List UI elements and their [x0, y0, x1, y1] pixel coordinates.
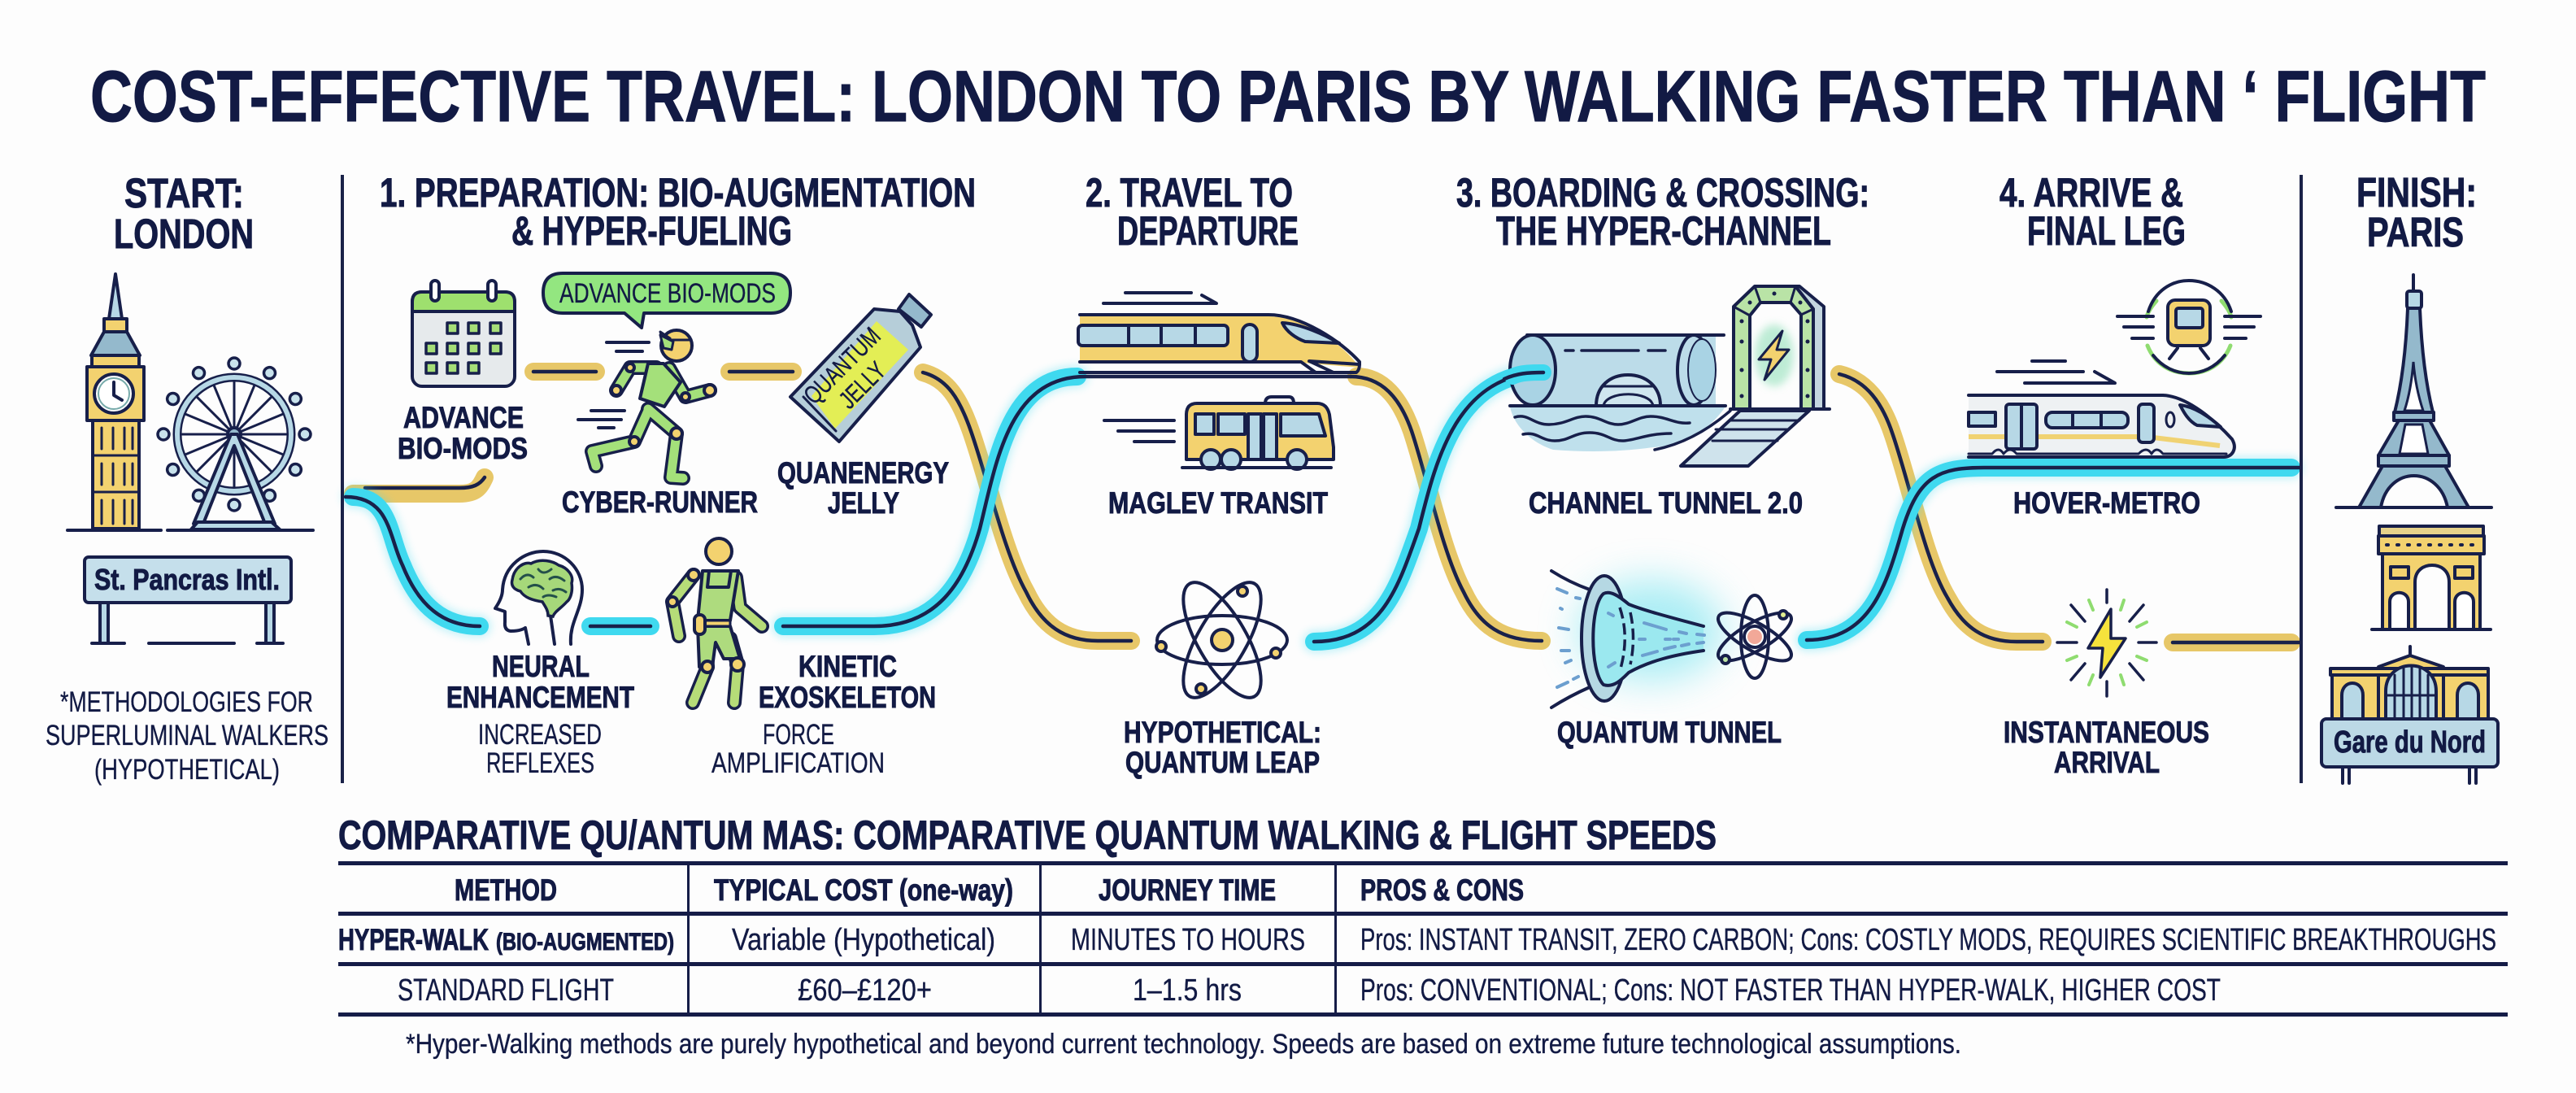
icon: bus	[1104, 397, 1334, 469]
heading: finish: FINISH:	[2356, 169, 2477, 216]
table header row: METHOD	[455, 873, 557, 907]
icon: gare du nord	[2330, 647, 2488, 719]
label: instantaneous arrival	[2004, 716, 2209, 779]
icon: quantum jelly: JELLY	[833, 356, 891, 414]
callout: advance bio-mods: ADVANCE BIO-MODS	[559, 278, 776, 309]
label: instantaneous arrival: ARRIVAL	[2054, 746, 2160, 779]
heading: start: LONDON	[114, 211, 254, 257]
heading: step 4: 4. ARRIVE &	[1999, 170, 2183, 216]
icon: cyber-runner	[578, 330, 716, 478]
heading: start: START:	[124, 170, 244, 216]
label: advance bio-mods: ADVANCE	[403, 401, 524, 434]
label: neural enhancement: ENHANCEMENT	[446, 681, 634, 714]
callout: advance bio-mods	[543, 273, 790, 328]
table rules	[338, 861, 2508, 1017]
label: channel tunnel 2.0: CHANNEL TUNNEL 2.0	[1529, 486, 1803, 520]
icon: kinetic exoskeleton	[668, 538, 762, 703]
table row: hyper-walk: (BIO-AUGMENTED)	[496, 929, 674, 956]
panel: step 3 boarding and crossing	[1456, 170, 1869, 749]
icon: hover-metro train	[1969, 361, 2234, 457]
table row: hyper-walk	[338, 923, 2496, 957]
footnote: *Hyper-Walking methods are purely hypothetical and beyond current technology. Speeds are based on extreme future technological assumptions.	[406, 1029, 1961, 1060]
table header row: TYPICAL COST (one-way)	[714, 873, 1013, 907]
heading: step 1	[380, 170, 976, 254]
label: quantum leap	[1124, 716, 1321, 779]
sign: st pancras	[85, 557, 291, 643]
label: quanenergy jelly: QUANENERGY	[777, 456, 949, 490]
text block: methodologies: (HYPOTHETICAL)	[94, 754, 280, 786]
panel: step 1 preparation	[380, 170, 976, 779]
heading: step 1: & HYPER-FUELING	[511, 208, 792, 254]
heading: step 2: DEPARTURE	[1117, 208, 1299, 254]
heading: step 3	[1456, 170, 1869, 254]
heading: step 2: 2. TRAVEL TO	[1086, 170, 1293, 216]
heading: step 2	[1086, 170, 1299, 254]
label: quanenergy jelly	[777, 456, 949, 520]
table: comparison	[338, 861, 2508, 1017]
icon: quantum tunnel	[1551, 571, 1798, 708]
label: quantum leap: QUANTUM LEAP	[1125, 746, 1320, 779]
label: neural enhancement	[446, 650, 634, 779]
table row: hyper-walk: MINUTES TO HOURS	[1071, 923, 1305, 957]
text block: methodologies: SUPERLUMINAL WALKERS	[46, 720, 329, 751]
icon: atom	[1156, 572, 1287, 708]
label: neural enhancement: INCREASED	[478, 719, 602, 751]
panel: step 4 arrive and final leg	[1969, 170, 2261, 779]
label: advance bio-mods	[398, 401, 528, 465]
label: advance bio-mods: BIO-MODS	[398, 432, 528, 465]
table header row: JOURNEY TIME	[1099, 873, 1276, 907]
label: neural enhancement: REFLEXES	[486, 747, 594, 779]
panel: step 2 travel to departure	[1078, 170, 1360, 779]
icon: calendar	[412, 281, 515, 386]
panel: finish paris	[2321, 169, 2498, 783]
label: kinetic exoskeleton: FORCE	[763, 719, 834, 751]
icon: instantaneous lightning	[2057, 590, 2156, 696]
ground line	[67, 529, 313, 532]
text block: methodologies	[46, 686, 329, 786]
heading: step 4	[1999, 170, 2186, 254]
icon: channel tunnel	[1504, 335, 1730, 451]
icon: quantum jelly: QUANTUM	[798, 321, 886, 410]
table row: standard flight: STANDARD FLIGHT	[398, 973, 614, 1008]
icon: big ben	[87, 274, 144, 529]
sign: gare du nord	[2321, 719, 2498, 783]
panel: start london	[46, 170, 329, 786]
divider: start column	[341, 175, 344, 783]
heading: step 4: FINAL LEG	[2027, 208, 2186, 254]
label: maglev transit: MAGLEV TRANSIT	[1108, 486, 1328, 520]
table row: standard flight: 1–1.5 hrs	[1133, 973, 1242, 1008]
icon: metro badge	[2117, 281, 2261, 373]
label: kinetic exoskeleton: KINETIC	[798, 650, 897, 683]
heading: step 1: 1. PREPARATION: BIO-AUGMENTATION	[380, 170, 976, 216]
icon: energy gate	[1681, 286, 1830, 466]
icon: eiffel tower	[2336, 275, 2491, 507]
heading: comparison table: COMPARATIVE QU/ANTUM MAS: COMPARATIVE QUANTUM WALKING & FLIGHT SPEEDS	[338, 812, 1717, 858]
icon: neural enhancement	[495, 551, 582, 644]
label: neural enhancement: NEURAL	[492, 650, 590, 683]
divider: finish column	[2300, 175, 2303, 783]
icon: arc de triomphe	[2372, 526, 2491, 629]
table row: standard flight: Pros: CONVENTIONAL; Cons: NOT FASTER THAN HYPER-WALK, HIGHER COST	[1360, 973, 2221, 1008]
route lines	[346, 372, 2300, 642]
label: quantum leap: HYPOTHETICAL:	[1124, 716, 1321, 749]
label: instantaneous arrival: INSTANTANEOUS	[2004, 716, 2209, 749]
label: quantum tunnel: QUANTUM TUNNEL	[1557, 716, 1782, 749]
text block: methodologies: *METHODOLOGIES FOR	[60, 686, 313, 718]
sign: st pancras: St. Pancras Intl.	[94, 563, 280, 596]
label: kinetic exoskeleton: AMPLIFICATION	[711, 747, 885, 779]
table row: standard flight: £60–£120+	[798, 973, 932, 1008]
label: kinetic exoskeleton	[711, 650, 936, 779]
heading: start	[114, 170, 254, 257]
heading: finish: PARIS	[2367, 209, 2464, 255]
table row: hyper-walk: HYPER-WALK	[338, 923, 489, 956]
label: kinetic exoskeleton: EXOSKELETON	[759, 681, 936, 714]
sign: gare du nord: Gare du Nord	[2334, 725, 2486, 760]
icon: london eye	[158, 358, 311, 529]
label: hover-metro: HOVER-METRO	[2013, 486, 2200, 520]
table header row	[455, 873, 1524, 907]
icon: maglev train	[1078, 293, 1360, 372]
heading: finish	[2356, 169, 2477, 255]
heading: step 3: 3. BOARDING & CROSSING:	[1456, 170, 1869, 216]
icon: quantum jelly	[790, 294, 931, 442]
table header row: PROS & CONS	[1360, 873, 1524, 907]
label: quanenergy jelly: JELLY	[828, 486, 899, 520]
table row: hyper-walk: Variable (Hypothetical)	[732, 923, 995, 957]
table row: standard flight	[398, 973, 2221, 1008]
label: cyber-runner: CYBER-RUNNER	[562, 486, 758, 519]
heading: step 3: THE HYPER-CHANNEL	[1496, 208, 1831, 254]
